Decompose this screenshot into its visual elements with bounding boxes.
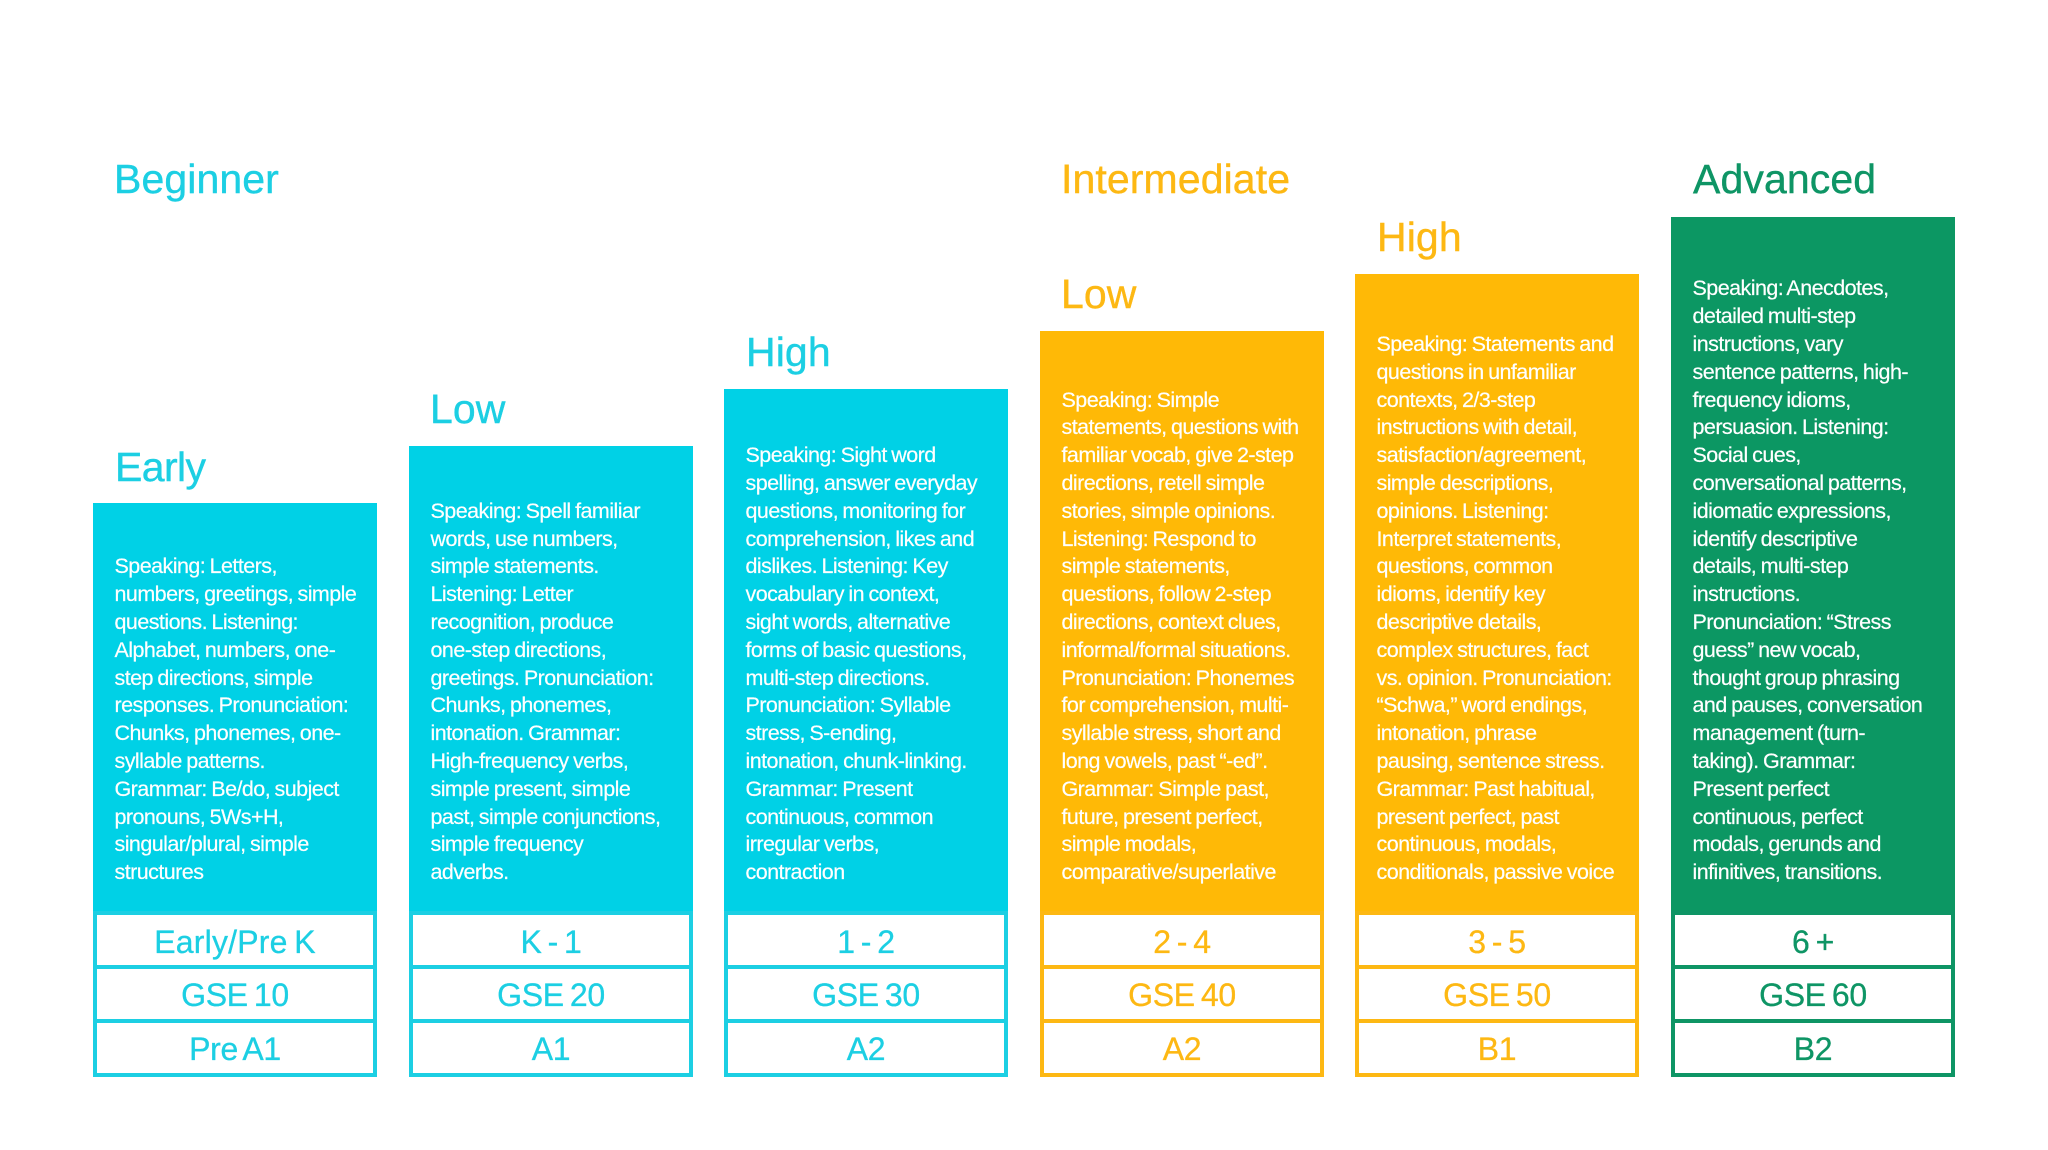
description: Advanced: idiomatic expressions, <box>1692 499 1891 523</box>
row: CEFR <box>1040 1019 1324 1077</box>
description: Low intermediate: future, present perfect, <box>1062 805 1263 829</box>
description: Low intermediate: questions, follow 2-step <box>1062 582 1271 606</box>
description: High intermediate: present perfect, past <box>1376 805 1559 829</box>
description: Low intermediate: Speaking: Simple <box>1062 388 1219 412</box>
description: Advanced: management (turn- <box>1692 721 1865 745</box>
description: Low intermediate: long vowels, past “-ed”. <box>1062 749 1268 773</box>
description: Low beginner <box>409 446 693 915</box>
heading: High (intermediate): High <box>1377 214 1462 260</box>
description: Early: step directions, simple <box>114 666 313 690</box>
description: Low beginner: past, simple conjunctions, <box>430 805 660 829</box>
panel: Low intermediate <box>1040 331 1324 1077</box>
description: High intermediate: continuous, modals, <box>1376 832 1556 856</box>
heading: Low (beginner): Low <box>430 386 506 432</box>
row: CEFR <box>1355 1019 1639 1077</box>
description: Advanced: identify descriptive <box>1692 527 1857 551</box>
description: High beginner: Grammar: Present <box>746 777 913 801</box>
description: Advanced: instructions, vary <box>1692 332 1843 356</box>
row: grade <box>93 911 377 969</box>
description: High intermediate: Grammar: Past habitual, <box>1376 777 1595 801</box>
description: Early: Chunks, phonemes, one- <box>114 721 341 745</box>
description: Early: Grammar: Be/do, subject <box>114 777 339 801</box>
description: Low beginner: words, use numbers, <box>430 527 618 551</box>
row: grade <box>1040 911 1324 969</box>
description: Early <box>93 503 377 915</box>
description: Low beginner: greetings. Pronunciation: <box>430 666 654 690</box>
description: Low intermediate: Pronunciation: Phonemes <box>1062 666 1294 690</box>
description: Advanced: frequency idioms, <box>1692 388 1851 412</box>
description: Early: structures <box>114 860 203 884</box>
description: High intermediate: vs. opinion. Pronunciation: <box>1376 666 1612 690</box>
description: Advanced: infinitives, transitions. <box>1692 860 1882 884</box>
description: High intermediate: questions, common <box>1376 554 1553 578</box>
description: Low beginner: intonation. Grammar: <box>430 721 620 745</box>
description: Low intermediate: simple modals, <box>1062 832 1196 856</box>
row: CEFR <box>93 1019 377 1077</box>
description: High intermediate: simple descriptions, <box>1376 471 1553 495</box>
heading: Intermediate: Intermediate <box>1061 156 1290 202</box>
row: GSE: GSE 40 <box>1128 977 1236 1013</box>
description: Low intermediate: comparative/superlative <box>1062 860 1276 884</box>
row: CEFR <box>1671 1019 1955 1077</box>
row: grade: 1 - 2 <box>837 924 895 960</box>
description: Advanced: conversational patterns, <box>1692 471 1907 495</box>
description: High intermediate: opinions. Listening: <box>1376 499 1549 523</box>
row: GSE: GSE 50 <box>1443 977 1551 1013</box>
description: High beginner: multi-step directions. <box>746 666 930 690</box>
description: Advanced: Social cues, <box>1692 443 1801 467</box>
description: Low intermediate: familiar vocab, give 2-step <box>1062 443 1293 467</box>
description: Early: pronouns, 5Ws+H, <box>114 805 283 829</box>
description: High beginner: forms of basic questions, <box>746 638 967 662</box>
row: GSE <box>409 965 693 1023</box>
description: Low beginner: simple frequency <box>430 832 583 856</box>
description: High beginner: stress, S-ending, <box>746 721 896 745</box>
row: GSE: GSE 20 <box>497 977 605 1013</box>
description: Low intermediate: directions, context clues, <box>1062 610 1281 634</box>
description: Advanced: detailed multi-step <box>1692 304 1856 328</box>
description: High intermediate: instructions with detail, <box>1376 415 1577 439</box>
description: Early: syllable patterns. <box>114 749 265 773</box>
description: Low intermediate: informal/formal situations. <box>1062 638 1291 662</box>
description: Advanced: Pronunciation: “Stress <box>1692 610 1891 634</box>
description: High beginner: spelling, answer everyday <box>746 471 977 495</box>
description: Low beginner: Speaking: Spell familiar <box>430 499 640 523</box>
description: Advanced: and pauses, conversation <box>1692 693 1922 717</box>
panel: Low beginner <box>409 446 693 1077</box>
heading: Early: Early <box>115 444 205 490</box>
description: Advanced: sentence patterns, high- <box>1692 360 1908 384</box>
description: High beginner <box>724 389 1008 915</box>
row: GSE <box>1355 965 1639 1023</box>
row: CEFR: A2 <box>847 1031 885 1067</box>
description: Low beginner: one-step directions, <box>430 638 606 662</box>
description: Low beginner: simple present, simple <box>430 777 630 801</box>
description: High intermediate: contexts, 2/3-step <box>1376 388 1535 412</box>
row: GSE <box>1671 965 1955 1023</box>
row: grade <box>1671 911 1955 969</box>
row: grade: Early/Pre K <box>154 924 316 960</box>
description: Low intermediate: directions, retell simple <box>1062 471 1264 495</box>
row: CEFR: A1 <box>532 1031 570 1067</box>
description: High beginner: Speaking: Sight word <box>746 443 936 467</box>
description: Advanced: details, multi-step <box>1692 554 1848 578</box>
description: Low beginner: recognition, produce <box>430 610 613 634</box>
heading: Advanced: Advanced <box>1693 156 1876 202</box>
description: Advanced: persuasion. Listening: <box>1692 415 1889 439</box>
description: High beginner: questions, monitoring for <box>746 499 965 523</box>
row: GSE: GSE 60 <box>1759 977 1867 1013</box>
description: Low intermediate: stories, simple opinions. <box>1062 499 1275 523</box>
description: Early: singular/plural, simple <box>114 832 309 856</box>
description: High beginner: sight words, alternative <box>746 610 950 634</box>
heading: Beginner: Beginner <box>114 156 279 202</box>
row: CEFR: Pre A1 <box>189 1031 281 1067</box>
panel: Early <box>93 503 377 1077</box>
row: grade <box>409 911 693 969</box>
description: Early: responses. Pronunciation: <box>114 693 348 717</box>
description: High beginner: contraction <box>746 860 845 884</box>
heading: High (beginner): High <box>746 329 831 375</box>
description: Advanced: taking). Grammar: <box>1692 749 1855 773</box>
row: CEFR <box>409 1019 693 1077</box>
description: Low beginner: simple statements. <box>430 554 599 578</box>
description: Advanced: continuous, perfect <box>1692 805 1863 829</box>
row: grade <box>724 911 1008 969</box>
panel: High intermediate <box>1355 274 1639 1077</box>
row: grade: K - 1 <box>520 924 582 960</box>
description: Early: questions. Listening: <box>114 610 298 634</box>
description: High beginner: irregular verbs, <box>746 832 879 856</box>
row: GSE <box>93 965 377 1023</box>
description: Low beginner: Listening: Letter <box>430 582 573 606</box>
row: grade: 2 - 4 <box>1153 924 1211 960</box>
description: Early: Speaking: Letters, <box>114 554 277 578</box>
row: grade: 6 + <box>1792 924 1834 960</box>
description: High beginner: comprehension, likes and <box>746 527 974 551</box>
description: Advanced: Present perfect <box>1692 777 1829 801</box>
description: Early: numbers, greetings, simple <box>114 582 356 606</box>
description: Low intermediate: Listening: Respond to <box>1062 527 1256 551</box>
description: Low intermediate: for comprehension, multi- <box>1062 693 1288 717</box>
description: High intermediate: intonation, phrase <box>1376 721 1537 745</box>
description: Low intermediate: Grammar: Simple past, <box>1062 777 1269 801</box>
row: CEFR: A2 <box>1163 1031 1201 1067</box>
description: Advanced: guess” new vocab, <box>1692 638 1860 662</box>
description: Low intermediate: simple statements, <box>1062 554 1230 578</box>
heading: Low (intermediate): Low <box>1061 271 1137 317</box>
description: High intermediate: “Schwa,” word endings, <box>1376 693 1587 717</box>
description: High beginner: vocabulary in context, <box>746 582 939 606</box>
description: Low intermediate <box>1040 331 1324 915</box>
description: High intermediate: conditionals, passive voice <box>1376 860 1614 884</box>
row: GSE: GSE 30 <box>812 977 920 1013</box>
description: Low beginner: High-frequency verbs, <box>430 749 628 773</box>
description: High beginner: intonation, chunk-linking. <box>746 749 967 773</box>
row: CEFR: B2 <box>1794 1031 1832 1067</box>
description: High beginner: continuous, common <box>746 805 933 829</box>
panel: Advanced <box>1671 217 1955 1077</box>
row: CEFR <box>724 1019 1008 1077</box>
description: Advanced: Speaking: Anecdotes, <box>1692 276 1888 300</box>
row: grade: 3 - 5 <box>1468 924 1526 960</box>
description: Advanced: instructions. <box>1692 582 1800 606</box>
row: GSE <box>1040 965 1324 1023</box>
description: Advanced <box>1671 217 1955 915</box>
description: Low intermediate: syllable stress, short and <box>1062 721 1281 745</box>
description: Early: Alphabet, numbers, one- <box>114 638 335 662</box>
description: High beginner: dislikes. Listening: Key <box>746 554 948 578</box>
description: Advanced: thought group phrasing <box>1692 666 1900 690</box>
description: Low beginner: adverbs. <box>430 860 509 884</box>
description: High intermediate <box>1355 274 1639 915</box>
description: High intermediate: Speaking: Statements and <box>1376 332 1614 356</box>
description: Low beginner: Chunks, phonemes, <box>430 693 611 717</box>
description: High beginner: Pronunciation: Syllable <box>746 693 951 717</box>
description: Advanced: modals, gerunds and <box>1692 832 1881 856</box>
panel: High beginner <box>724 389 1008 1077</box>
row: grade <box>1355 911 1639 969</box>
description: High intermediate: questions in unfamiliar <box>1376 360 1576 384</box>
row: GSE: GSE 10 <box>181 977 289 1013</box>
description: High intermediate: idioms, identify key <box>1376 582 1545 606</box>
description: High intermediate: descriptive details, <box>1376 610 1541 634</box>
row: CEFR: B1 <box>1478 1031 1516 1067</box>
description: High intermediate: complex structures, fact <box>1376 638 1588 662</box>
row: GSE <box>724 965 1008 1023</box>
description: High intermediate: satisfaction/agreement, <box>1376 443 1586 467</box>
description: High intermediate: pausing, sentence stress. <box>1376 749 1605 773</box>
description: Low intermediate: statements, questions with <box>1062 415 1299 439</box>
description: High intermediate: Interpret statements, <box>1376 527 1561 551</box>
